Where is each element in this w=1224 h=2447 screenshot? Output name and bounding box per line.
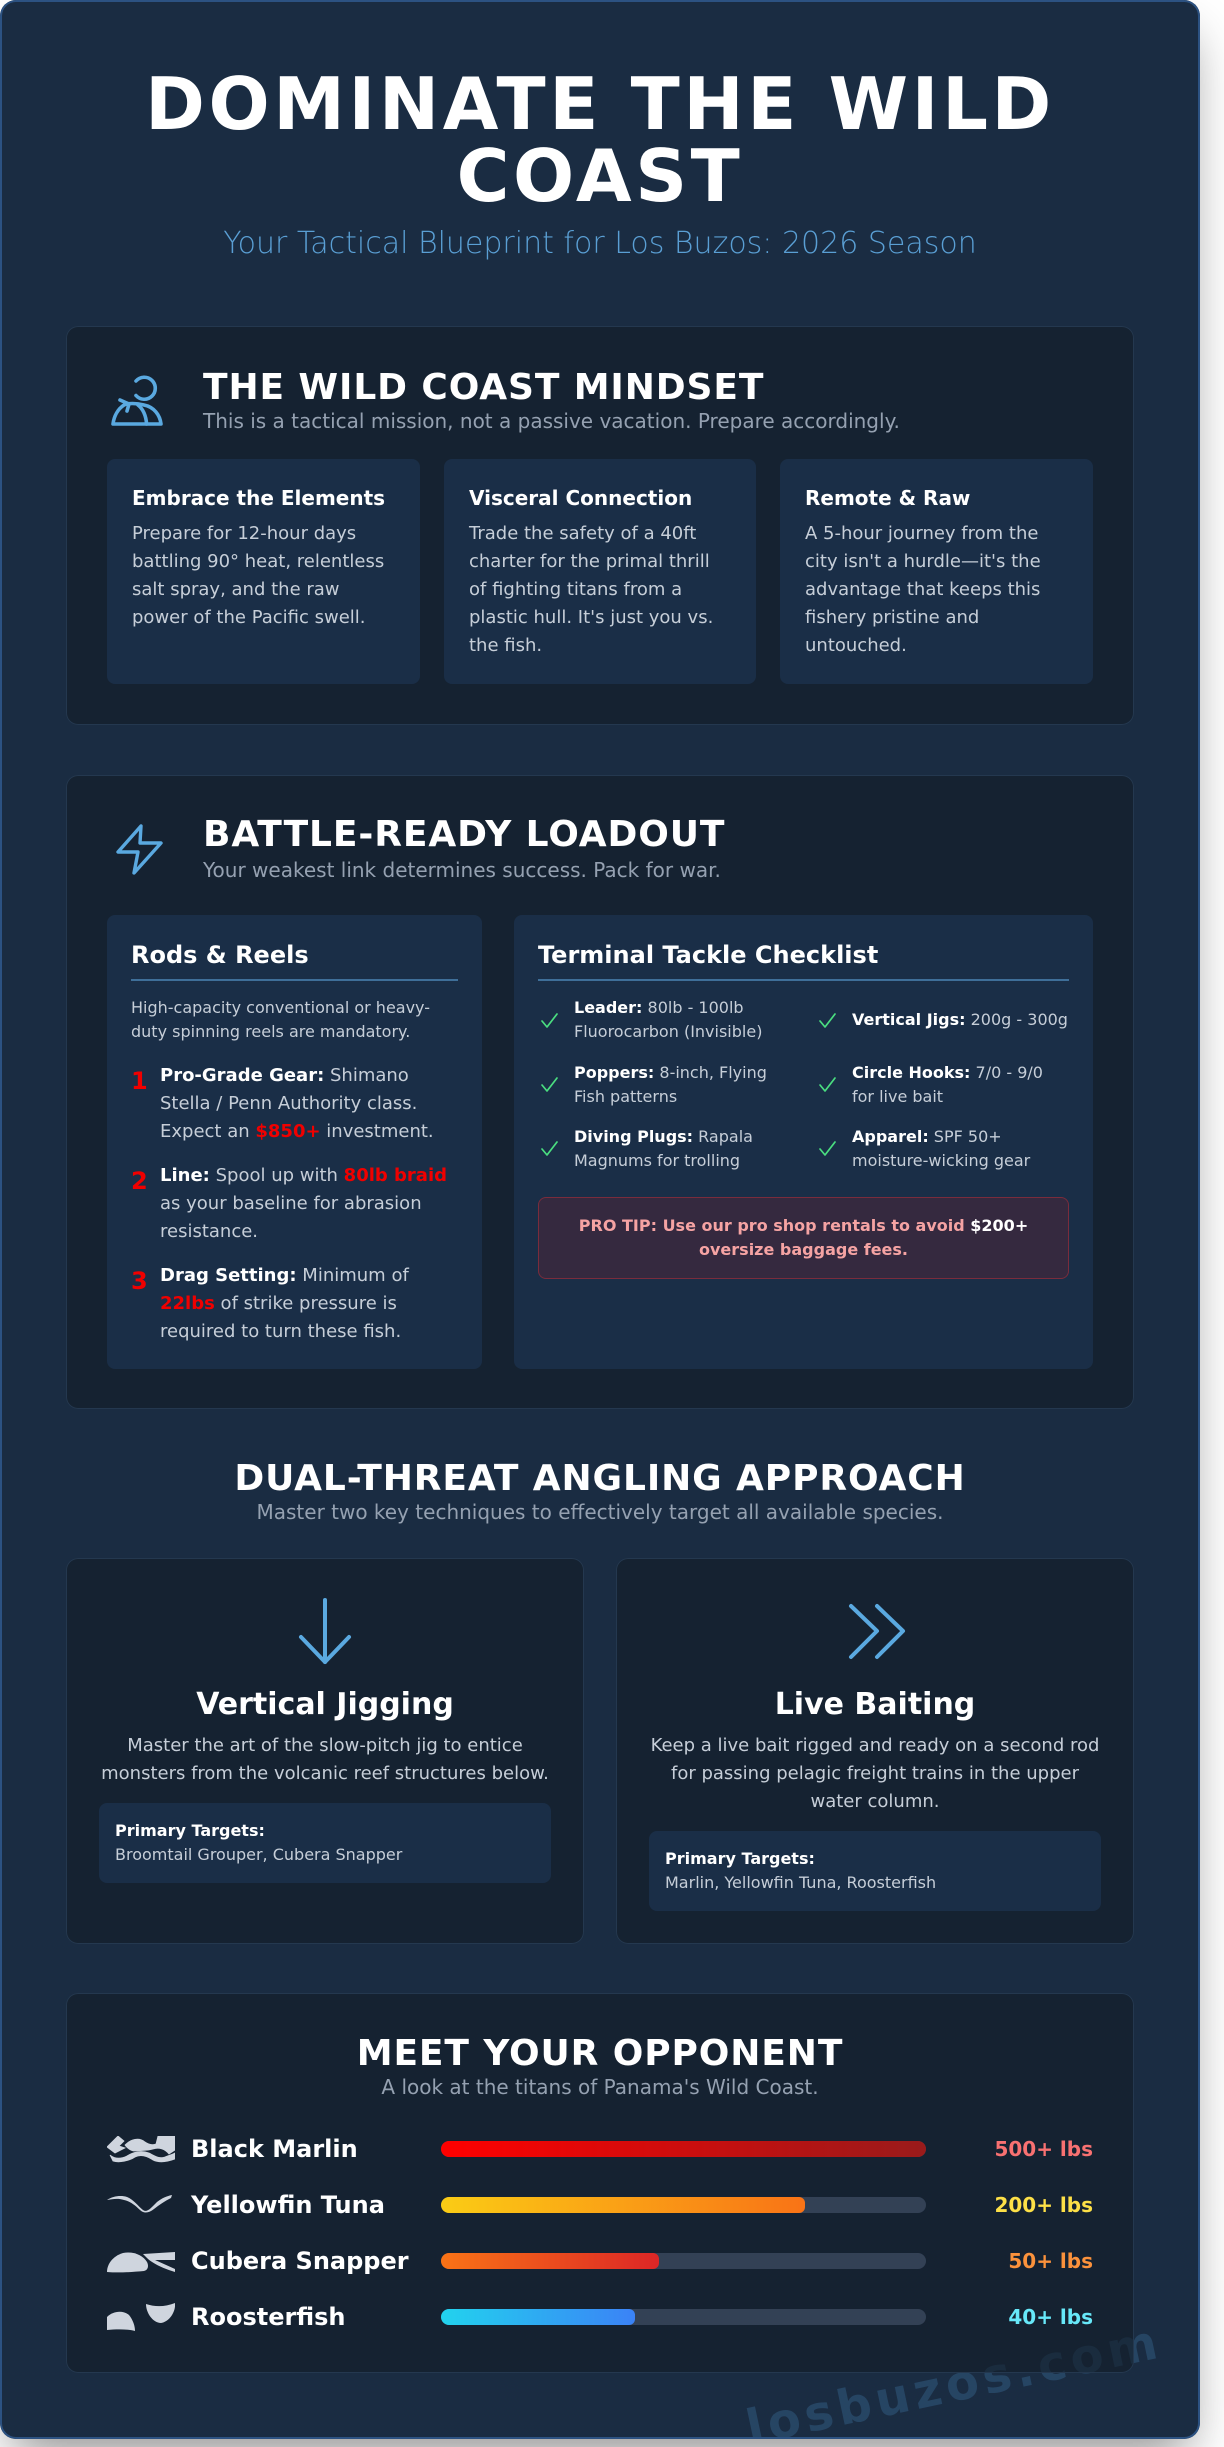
- card: visceral connection: [444, 459, 756, 684]
- item text: 22lbs of strike pressure is: [160, 1293, 397, 1314]
- panel: vertical jigging: [66, 1558, 584, 1944]
- targets text: Broomtail Grouper, Cubera Snapper: [115, 1845, 402, 1864]
- primary targets box: [649, 1831, 1101, 1911]
- check icon: [819, 1141, 836, 1156]
- card heading: Remote & Raw: [805, 486, 970, 510]
- icon: arrow down: [298, 1598, 352, 1664]
- heading: MEET YOUR OPPONENT: [357, 2033, 843, 2074]
- card text: Trade the safety of a 40ft: [469, 523, 696, 544]
- value: 500+ lbs: [994, 2137, 1093, 2161]
- card text: salt spray, and the raw: [132, 579, 340, 600]
- title: COAST: [457, 134, 743, 218]
- check item: leader: Leader: 80lb - 100lb: [574, 998, 744, 1017]
- check item: poppers: [574, 1063, 767, 1106]
- card text: untouched.: [805, 635, 907, 656]
- icon: cubera snapper: [107, 2252, 175, 2272]
- check item: apparel: moisture-wicking gear: [852, 1151, 1030, 1170]
- card: terminal tackle checklist: [514, 915, 1093, 1369]
- item text: [160, 1165, 447, 1242]
- section description: A look at the titans of Panama's Wild Coast.: [381, 2075, 819, 2099]
- item text: [160, 1065, 434, 1142]
- technique title: Live Baiting: [775, 1687, 975, 1722]
- card: remote and raw: [780, 459, 1093, 684]
- card text: advantage that keeps this: [805, 579, 1040, 600]
- item text: [160, 1265, 410, 1342]
- list item 2: [131, 1165, 447, 1242]
- bar fill 40%: [441, 2309, 635, 2325]
- item text: required to turn these fish.: [160, 1321, 401, 1342]
- technique description: [651, 1735, 1099, 1812]
- check item: apparel: Apparel: SPF 50+: [852, 1127, 1002, 1146]
- title: [145, 62, 1055, 218]
- name: Cubera Snapper: [191, 2247, 409, 2275]
- row: cubera snapper: [107, 2247, 1093, 2275]
- number 1: 1: [131, 1067, 148, 1095]
- card text: [468, 523, 713, 656]
- check icon: [819, 1013, 836, 1028]
- item text: Stella / Penn Authority class.: [160, 1093, 417, 1114]
- primary targets box: [99, 1803, 551, 1883]
- card text: city isn't a hurdle—it's the: [805, 551, 1041, 572]
- check item: circle hooks: for live bait: [852, 1087, 943, 1106]
- icon: lightning bolt: [116, 824, 163, 875]
- callout: pro tip: oversize baggage fees.: [699, 1240, 908, 1259]
- technique description: Keep a live bait rigged and ready on a second rod: [651, 1735, 1099, 1756]
- check item: diving plugs: Magnums for trolling: [574, 1151, 740, 1170]
- check item: circle hooks: Circle Hooks: 7/0 - 9/0: [852, 1063, 1043, 1082]
- bar track: [441, 2197, 926, 2213]
- title: DOMINATE THE WILD: [145, 62, 1055, 146]
- card text: [132, 523, 384, 628]
- check icon: [541, 1013, 558, 1028]
- name: Roosterfish: [191, 2303, 346, 2331]
- card text: power of the Pacific swell.: [132, 607, 366, 628]
- check icon: [541, 1077, 558, 1092]
- list item 1: [131, 1065, 434, 1142]
- targets text: Primary Targets:: [115, 1821, 265, 1840]
- check item: circle hooks: [852, 1063, 1043, 1106]
- card text: the fish.: [469, 635, 542, 656]
- intro text: duty spinning reels are mandatory.: [131, 1022, 410, 1041]
- check icon: [819, 1077, 836, 1092]
- card text: charter for the primal thrill: [469, 551, 710, 572]
- number 3: 3: [131, 1267, 148, 1295]
- number 2: 2: [131, 1167, 148, 1195]
- card heading: Rods & Reels: [131, 941, 309, 969]
- card text: A 5-hour journey from the: [805, 523, 1038, 544]
- card text: plastic hull. It's just you vs.: [469, 607, 713, 628]
- name: Yellowfin Tuna: [191, 2191, 385, 2219]
- intro text: High-capacity conventional or heavy-: [131, 998, 430, 1017]
- card: rods and reels: [107, 915, 482, 1369]
- targets text: Marlin, Yellowfin Tuna, Roosterfish: [665, 1873, 936, 1892]
- panel: meet your opponent: [66, 1993, 1134, 2373]
- value: 40+ lbs: [1008, 2305, 1093, 2329]
- item text: Pro-Grade Gear: Shimano: [160, 1065, 409, 1086]
- bar fill 75%: [441, 2197, 805, 2213]
- heading: DUAL-THREAT ANGLING APPROACH: [234, 1458, 966, 1499]
- card: embrace the elements: [107, 459, 420, 684]
- value: 50+ lbs: [1008, 2249, 1093, 2273]
- item text: as your baseline for abrasion: [160, 1193, 422, 1214]
- targets text: Primary Targets:: [665, 1849, 815, 1868]
- check item: leader: Fluorocarbon (Invisible): [574, 1022, 762, 1041]
- icon: roosterfish: [107, 2303, 175, 2331]
- heading: THE WILD COAST MINDSET: [203, 367, 764, 408]
- item text: Expect an $850+ investment.: [160, 1121, 434, 1142]
- card text: Prepare for 12-hour days: [132, 523, 356, 544]
- check item: poppers: Fish patterns: [574, 1087, 677, 1106]
- targets text: [665, 1849, 936, 1892]
- section description: Your weakest link determines success. Pack for war.: [203, 858, 721, 882]
- section description: This is a tactical mission, not a passive vacation. Prepare accordingly.: [203, 409, 900, 433]
- item text: resistance.: [160, 1221, 258, 1242]
- name: Black Marlin: [191, 2135, 358, 2163]
- row: yellowfin tuna: [107, 2191, 1093, 2219]
- icon: double chevron: [848, 1604, 906, 1660]
- section description: Master two key techniques to effectively target all available species.: [256, 1500, 944, 1524]
- icon: black marlin: [107, 2136, 175, 2162]
- section heading: dual-threat angling approach: [234, 1458, 966, 1524]
- icon: yellowfin tuna: [107, 2195, 172, 2212]
- check item: leader: [574, 998, 762, 1041]
- bar track: [441, 2309, 926, 2325]
- card heading: Visceral Connection: [469, 486, 692, 510]
- subtitle: Your Tactical Blueprint for Los Buzos: 2026 Season: [223, 226, 977, 261]
- callout: pro tip: [538, 1197, 1069, 1279]
- check icon: [541, 1141, 558, 1156]
- bar track: [441, 2141, 926, 2157]
- panel: battle-ready loadout: [66, 775, 1134, 1409]
- list item 3: [131, 1265, 410, 1342]
- technique description: monsters from the volcanic reef structures below.: [101, 1763, 549, 1784]
- technique description: [101, 1735, 549, 1784]
- panel: the wild coast mindset: [66, 326, 1134, 725]
- technique title: Vertical Jigging: [196, 1687, 454, 1722]
- heading: BATTLE-READY LOADOUT: [203, 814, 725, 855]
- card heading: Terminal Tackle Checklist: [538, 941, 878, 969]
- bar fill 100%: [441, 2141, 926, 2157]
- bar track: [441, 2253, 926, 2269]
- check item: diving plugs: [574, 1127, 753, 1170]
- check item: poppers: Poppers: 8-inch, Flying: [574, 1063, 767, 1082]
- item text: Line: Spool up with 80lb braid: [160, 1165, 447, 1186]
- row: roosterfish: [107, 2303, 1093, 2331]
- row: black marlin: [107, 2135, 1093, 2163]
- check item: vertical jigs: Vertical Jigs: 200g - 300g: [852, 1010, 1068, 1029]
- icon: fisherman: [111, 376, 163, 426]
- technique description: Master the art of the slow-pitch jig to entice: [127, 1735, 523, 1756]
- card heading: Embrace the Elements: [132, 486, 385, 510]
- card text: of fighting titans from a: [469, 579, 682, 600]
- card text: [805, 523, 1041, 656]
- value: 200+ lbs: [994, 2193, 1093, 2217]
- technique description: water column.: [810, 1791, 940, 1812]
- intro text: [131, 998, 430, 1041]
- card text: fishery pristine and: [805, 607, 979, 628]
- targets text: [115, 1821, 402, 1864]
- callout: pro tip: PRO TIP: Use our pro shop rentals to avoid $200+: [579, 1216, 1028, 1235]
- card text: battling 90° heat, relentless: [132, 551, 384, 572]
- check item: diving plugs: Diving Plugs: Rapala: [574, 1127, 753, 1146]
- technique description: for passing pelagic freight trains in the upper: [671, 1763, 1079, 1784]
- check item: apparel: [852, 1127, 1030, 1170]
- panel: live baiting: [616, 1558, 1134, 1944]
- bar fill 45%: [441, 2253, 659, 2269]
- item text: Drag Setting: Minimum of: [160, 1265, 409, 1286]
